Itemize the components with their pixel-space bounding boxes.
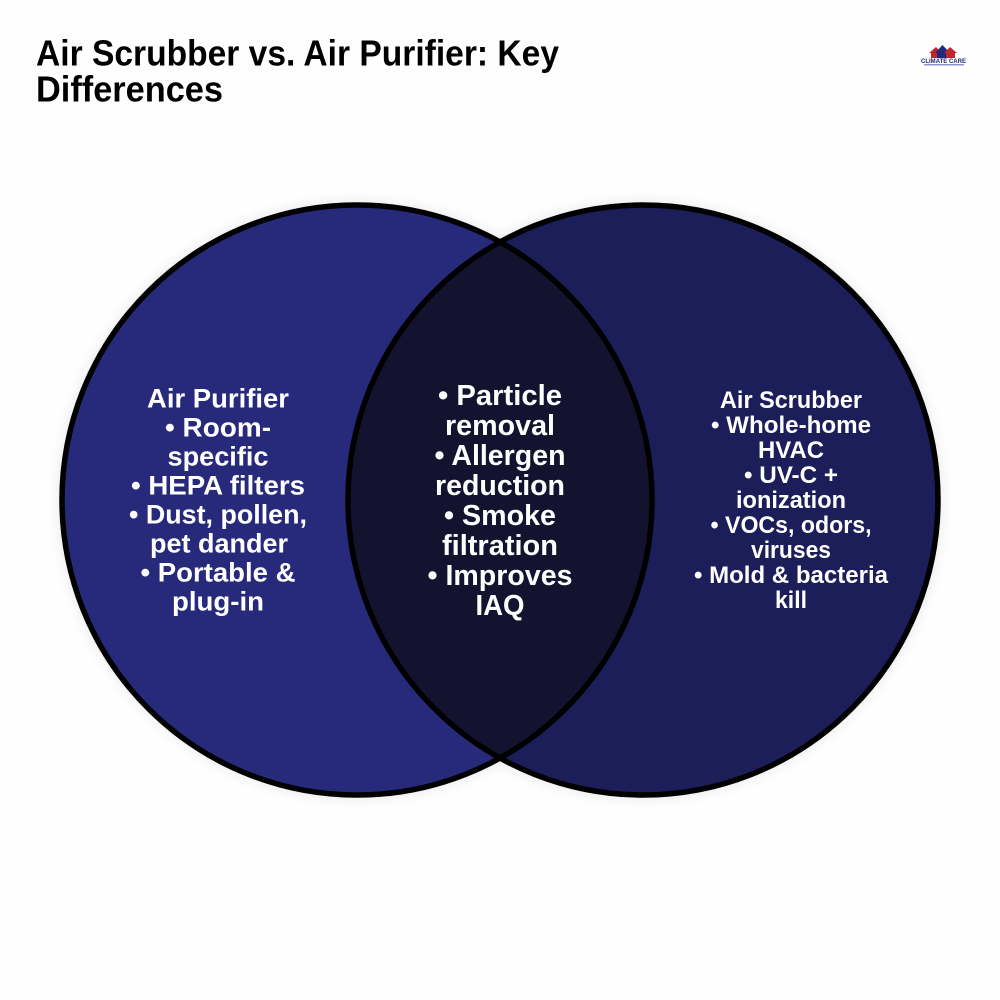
text: air purifier list: • Dust, pollen,	[129, 500, 307, 530]
text: air purifier list: • Portable &	[140, 558, 296, 588]
text: air scrubber list: Air Scrubber	[720, 387, 862, 414]
text: air scrubber list: viruses	[751, 537, 831, 564]
soft shadow around circles	[60, 203, 940, 797]
text: shared benefits list: filtration	[442, 530, 558, 562]
icon: Climate Care logo: CLIMATE CARE	[921, 58, 967, 65]
text: air scrubber list: • Whole-home	[711, 412, 871, 439]
text: air scrubber list: kill	[775, 587, 807, 614]
text: air purifier list: specific	[168, 442, 268, 472]
circle: air scrubber	[348, 205, 938, 795]
text: air scrubber list: • UV-C +	[744, 462, 838, 489]
overlap region	[350, 245, 650, 755]
circle outlines	[62, 205, 938, 795]
text: air purifier list: pet dander	[150, 528, 288, 558]
text: air purifier list: • HEPA filters	[131, 470, 305, 500]
text: shared benefits list: reduction	[435, 470, 565, 502]
text: shared benefits list: • Smoke	[444, 500, 556, 532]
text: shared benefits list: • Particle	[438, 380, 562, 412]
text: shared benefits list: IAQ	[476, 590, 524, 622]
text: air scrubber list: • VOCs, odors,	[710, 512, 872, 539]
text: shared benefits list: • Allergen	[434, 440, 566, 472]
text: air scrubber list: HVAC	[758, 437, 824, 464]
text: air purifier list	[129, 384, 307, 616]
text: air purifier list: • Room-	[165, 412, 271, 442]
text: shared benefits list: removal	[445, 410, 555, 442]
text: air scrubber list	[694, 387, 889, 614]
text: air scrubber list: • Mold & bacteria	[694, 562, 889, 589]
venn diagram	[62, 205, 938, 795]
text: air scrubber list: ionization	[736, 487, 846, 514]
circle: air purifier	[62, 205, 652, 795]
text: shared benefits list: • Improves	[428, 560, 572, 592]
title	[36, 32, 559, 110]
title: Differences	[36, 68, 223, 110]
text: air purifier list: Air Purifier	[147, 384, 289, 414]
text: shared benefits list	[428, 380, 572, 622]
title: Air Scrubber vs. Air Purifier: Key	[36, 32, 559, 74]
text: air purifier list: plug-in	[172, 586, 264, 616]
icon: Climate Care logo	[921, 45, 967, 66]
